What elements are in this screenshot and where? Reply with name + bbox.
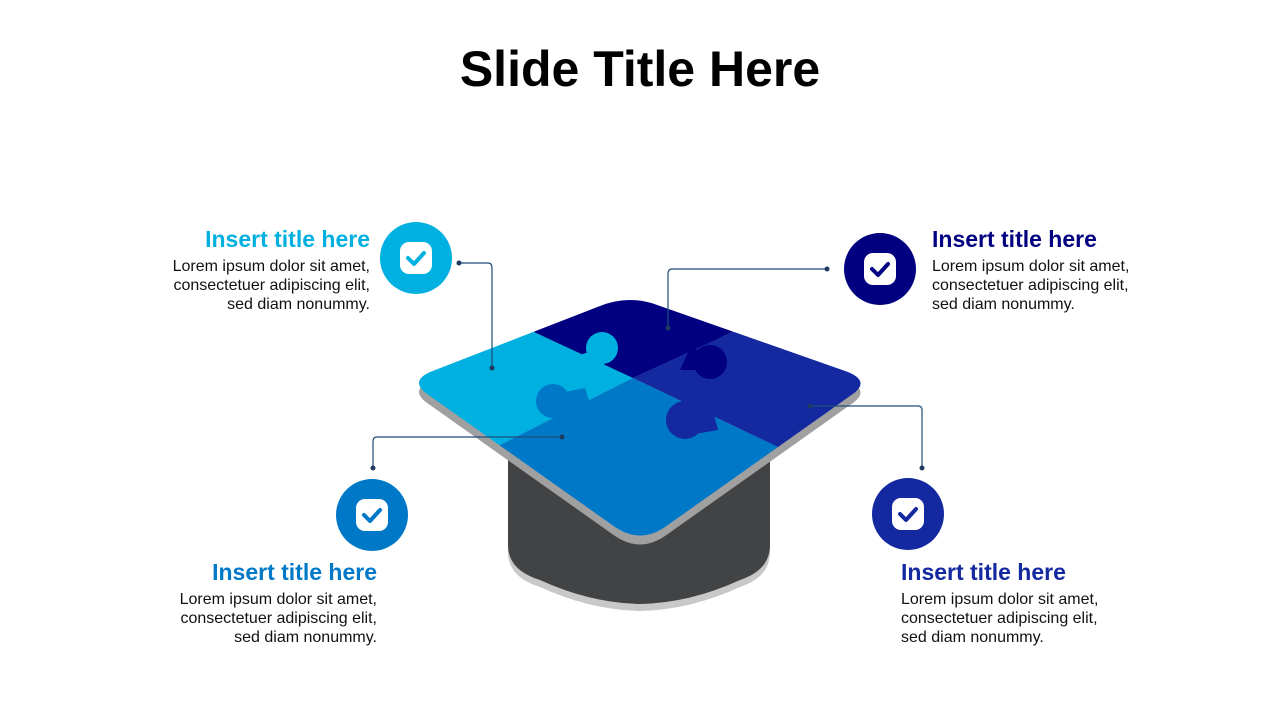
icon: top-left check: [380, 222, 452, 294]
text block: bottom-right: [901, 559, 1098, 646]
text block: bottom-right: sed diam nonummy.: [901, 629, 1044, 646]
text block: top-right: Insert title here: [932, 226, 1097, 252]
title: Slide Title Here: [460, 41, 820, 97]
text block: bottom-right: consectetuer adipiscing elit,: [901, 610, 1098, 627]
icon: bottom-right check: [872, 478, 944, 550]
text block: top-right: [932, 226, 1129, 313]
icon: top-right check: [844, 233, 916, 305]
piece: bottom: [500, 378, 778, 536]
text block: bottom-right: Insert title here: [901, 559, 1066, 585]
text block: top-right: Lorem ipsum dolor sit amet,: [932, 258, 1129, 275]
text block: top-left: [173, 226, 370, 313]
text block: top-left: consectetuer adipiscing elit,: [173, 277, 370, 294]
text block: top-left: Lorem ipsum dolor sit amet,: [173, 258, 370, 275]
graduation cap: [419, 300, 860, 611]
text block: bottom-left: consectetuer adipiscing elit,: [180, 610, 377, 627]
text block: bottom-right: Lorem ipsum dolor sit amet,: [901, 591, 1098, 608]
piece: top: [534, 300, 734, 378]
icon: bottom-left check: [336, 479, 408, 551]
text block: top-right: sed diam nonummy.: [932, 296, 1075, 313]
piece: right: [634, 332, 860, 447]
text block: top-left: Insert title here: [205, 226, 370, 252]
board thickness: [419, 309, 861, 544]
puzzle board: [419, 300, 860, 536]
cap body: [508, 465, 770, 611]
text block: top-left: sed diam nonummy.: [227, 296, 370, 313]
text block: bottom-left: [180, 559, 377, 646]
text block: bottom-left: Lorem ipsum dolor sit amet,: [180, 591, 377, 608]
text block: bottom-left: sed diam nonummy.: [234, 629, 377, 646]
piece: left: [419, 332, 633, 446]
connector lines: [373, 263, 922, 468]
text block: bottom-left: Insert title here: [212, 559, 377, 585]
text block: top-right: consectetuer adipiscing elit,: [932, 277, 1129, 294]
